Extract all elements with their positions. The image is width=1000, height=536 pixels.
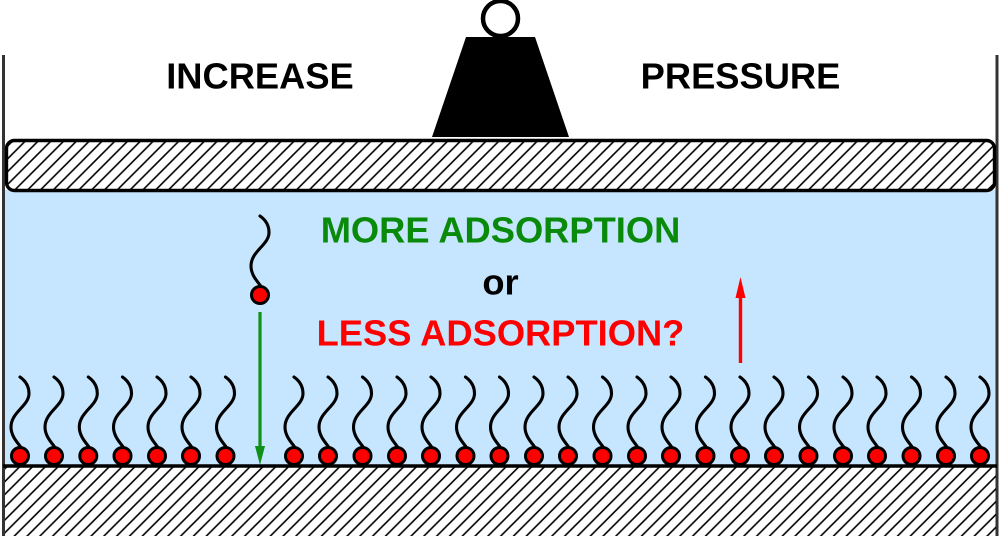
left container wall — [2, 55, 5, 536]
heading: increase: INCREASE — [166, 56, 354, 96]
bottom hatched surface — [5, 466, 996, 536]
icon: weight — [432, 1, 569, 137]
free molecule — [251, 216, 269, 304]
piston plate — [6, 140, 994, 190]
right container wall — [996, 55, 998, 536]
red arrow: desorption — [736, 277, 746, 363]
heading: pressure: PRESSURE — [641, 56, 840, 96]
text: less adsorption: LESS ADSORPTION? — [317, 312, 684, 354]
surface line — [3, 464, 997, 468]
text: more adsorption: MORE ADSORPTION — [321, 210, 680, 250]
green arrow: adsorption — [255, 312, 265, 465]
adsorbed molecules — [11, 377, 989, 464]
liquid region — [3, 190, 997, 466]
text: or: or — [482, 262, 519, 302]
